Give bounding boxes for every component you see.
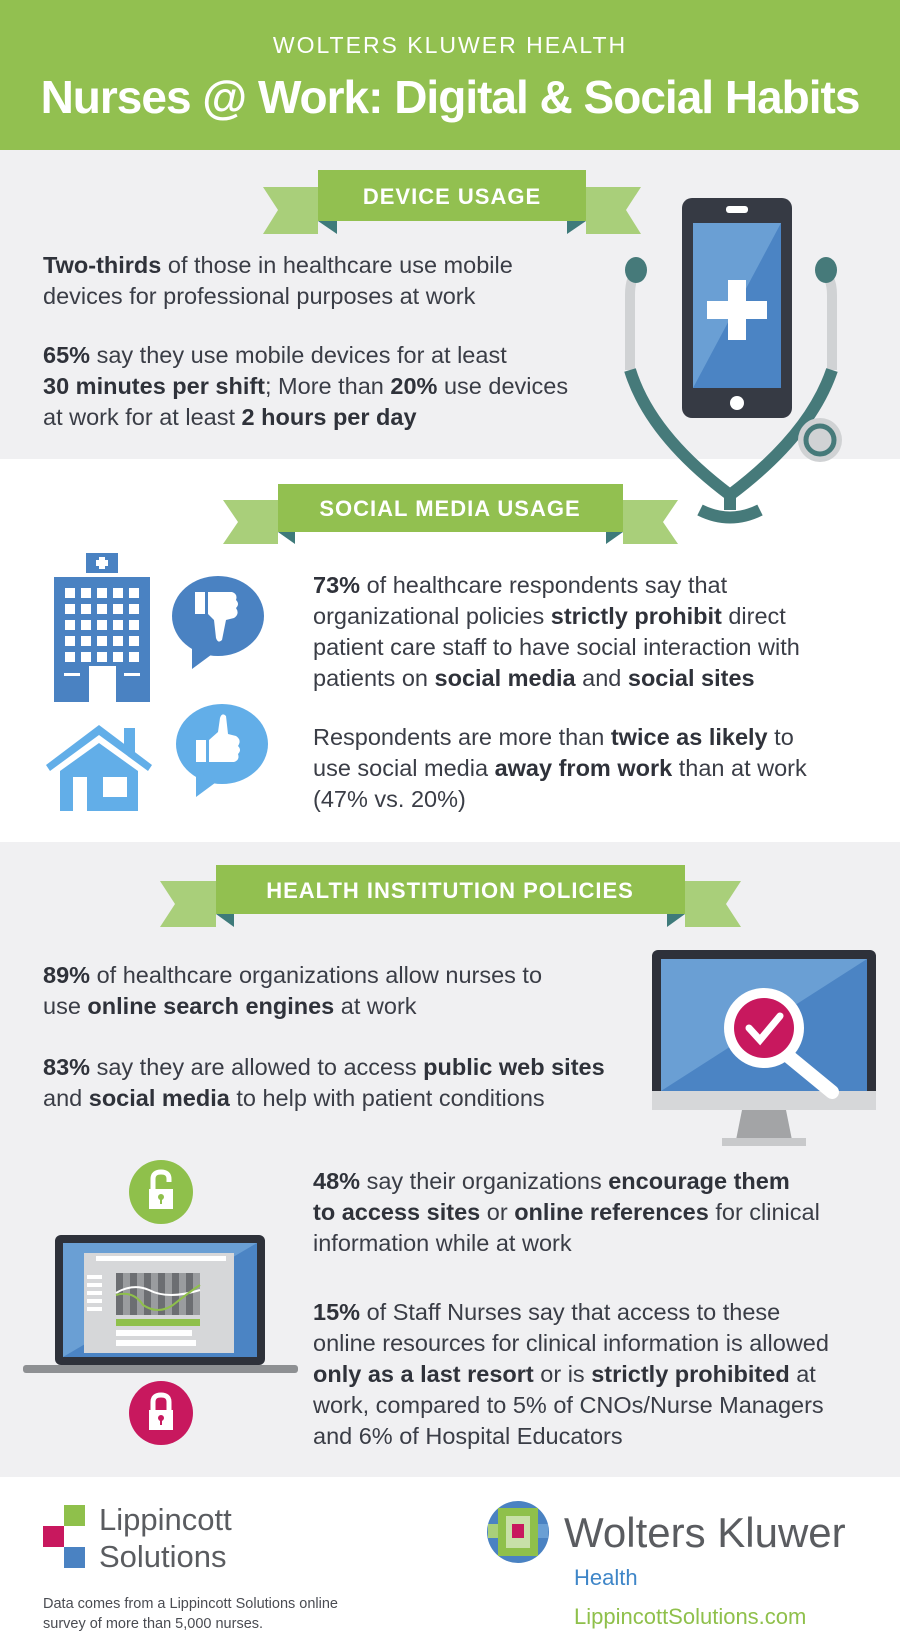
icon: house (46, 725, 152, 811)
text: 65%: 65% say they use mobile devices for at least (43, 342, 507, 368)
text: 15% (313, 1299, 829, 1449)
text: 65%: 30 minutes per shift; More than 20% use devices (43, 373, 568, 399)
icon: thumbs up bubble (176, 704, 268, 797)
text: 83% (43, 1054, 605, 1111)
text: 48%: information while at work (313, 1230, 572, 1256)
footer: lippincott logo (43, 1502, 232, 1574)
footer: wolters kluwer logo: Wolters Kluwer (564, 1509, 846, 1556)
header (0, 0, 900, 150)
text: 73%: 73% of healthcare respondents say that (313, 572, 727, 598)
ribbon: device usage: DEVICE USAGE (363, 184, 541, 209)
text: two-thirds (43, 252, 513, 309)
text: twice as likely (313, 724, 807, 812)
text: 15%: work, compared to 5% of CNOs/Nurse Managers (313, 1392, 824, 1418)
footer: wolters kluwer logo (487, 1501, 846, 1629)
icon: green unlocked lock (129, 1160, 193, 1224)
icon: laptop with chart (23, 1235, 298, 1373)
text: 73%: patient care staff to have social interaction with (313, 634, 800, 660)
text: 89%: 89% of healthcare organizations allow nurses to (43, 962, 542, 988)
health label: Health (574, 1565, 638, 1590)
icon: red locked lock (129, 1381, 193, 1445)
text: 83%: and social media to help with patient conditions (43, 1085, 545, 1111)
text: twice as likely: (47% vs. 20%) (313, 786, 466, 812)
text: 73%: patients on social media and social sites (313, 665, 755, 691)
text: 65%: at work for at least 2 hours per day (43, 404, 417, 430)
text: 48% (313, 1168, 820, 1256)
ribbon: device usage (263, 170, 641, 234)
footer: lippincott logo: Lippincott (99, 1502, 232, 1537)
footer: data source note: Data comes from a Lippincott Solutions online (43, 1596, 338, 1612)
icon: phone with stethoscope (624, 198, 842, 524)
text: 15%: online resources for clinical information is allowed (313, 1330, 829, 1356)
ribbon: social media usage (223, 484, 678, 544)
header kicker: WOLTERS KLUWER HEALTH (273, 32, 627, 58)
ribbon: health institution policies: HEALTH INSTITUTION POLICIES (266, 878, 634, 903)
text: 83%: 83% say they are allowed to access public web sites (43, 1054, 605, 1080)
url: LippincottSolutions.com (574, 1604, 806, 1629)
panel: social media usage (0, 459, 900, 842)
icon: hospital (54, 553, 150, 702)
text: 15%: and 6% of Hospital Educators (313, 1423, 623, 1449)
icon: monitor with magnifier (652, 950, 876, 1146)
footer: data source note: survey of more than 5,000 nurses. (43, 1616, 263, 1632)
panel: device usage (0, 150, 900, 459)
text: 65% (43, 342, 568, 430)
panel: health institution policies (0, 842, 900, 1477)
text: 48%: to access sites or online references for clinical (313, 1199, 820, 1225)
text: 15%: 15% of Staff Nurses say that access to these (313, 1299, 780, 1325)
footer: lippincott logo: Solutions (99, 1539, 227, 1574)
text: 89%: use online search engines at work (43, 993, 417, 1019)
icon: thumbs down bubble (172, 576, 264, 669)
ribbon: health institution policies (160, 865, 741, 927)
footer: data source note (43, 1596, 338, 1632)
text: 73% (313, 572, 800, 691)
title: Nurses @ Work: Digital & Social Habits (41, 71, 859, 123)
ribbon: social media usage: SOCIAL MEDIA USAGE (319, 496, 581, 521)
text: two-thirds: Two-thirds of those in healthcare use mobile (43, 252, 513, 278)
text: 89% (43, 962, 542, 1019)
text: 73%: organizational policies strictly prohibit direct (313, 603, 786, 629)
text: 48%: 48% say their organizations encourage them (313, 1168, 790, 1194)
text: two-thirds: devices for professional purposes at work (43, 283, 475, 309)
text: twice as likely: Respondents are more than twice as likely to (313, 724, 794, 750)
text: 15%: only as a last resort or is strictly prohibited at (313, 1361, 816, 1387)
text: twice as likely: use social media away from work than at work (313, 755, 807, 781)
